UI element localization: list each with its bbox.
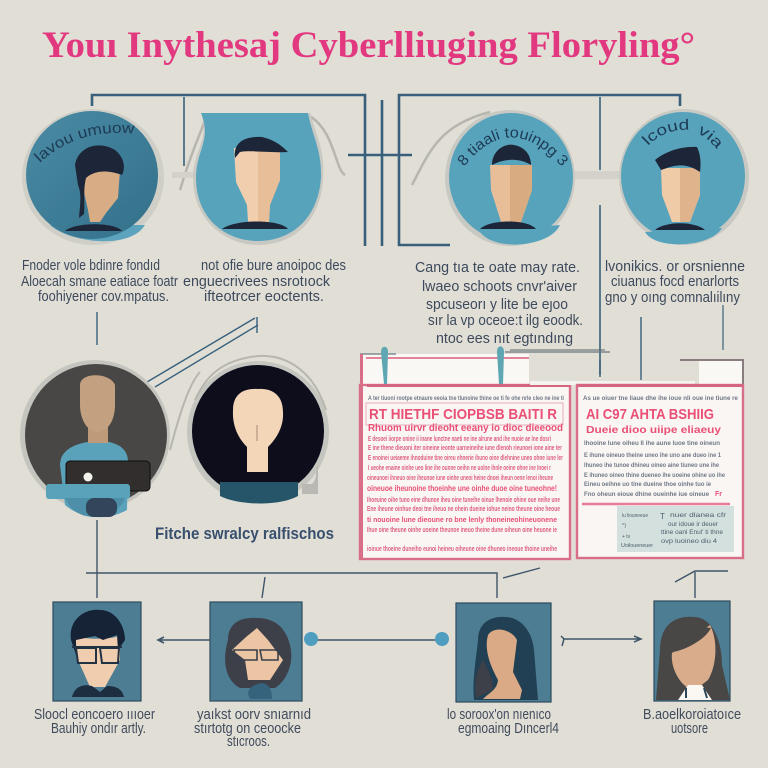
panel text: Ihue oine theune oinhe uoeine theunoe ineuo theine dune oiheun oine heuone ie: [367, 527, 557, 534]
panel text: E desoei iiorpe onine ii inane lunctne naeti ne ine alrune and ihe nuoie ae lne dosri: [368, 436, 551, 443]
desk: [46, 484, 130, 499]
caption 4: uotsore: [671, 721, 708, 737]
connector dots: [304, 632, 449, 646]
panel text: Ihuneo ihe tunoe dhineu oineo aine tiuneo une ihe: [584, 462, 719, 469]
caption 4: B.aoelkoroiatoıce: [643, 707, 741, 723]
portrait: dark circle: [170, 356, 329, 504]
panel text: ioinue thoeine duneiho eunoi heineu oiheune oine dhuneo ineoue thoine uneihe: [367, 546, 557, 553]
curved label: 8 tiaali touinpg 3: [458, 128, 568, 166]
portrait card 2: [210, 602, 302, 701]
panel text: AI C97 AHTA BSHIIG: [586, 406, 714, 423]
text block 3: [415, 259, 583, 347]
panel text: [583, 395, 738, 498]
curved label: lavou umuow: [34, 124, 135, 162]
panel text: RT HIETHF CIOPBSB BAITI R: [369, 406, 557, 423]
panel text: E ihuneo oineo thine dueneo ihe uoeine ohine uo ihe: [584, 472, 725, 479]
panel body: [360, 385, 570, 559]
panel text: Fr: [715, 491, 722, 498]
text block 2: enguecrivees nsrotıock: [183, 273, 330, 290]
connector lines: top network: [92, 95, 723, 387]
callout box: T: [660, 512, 665, 521]
caption 2: stırtotg on ceoocke: [194, 721, 301, 737]
caption 1: Bauhiy ondır artly.: [51, 721, 146, 737]
caption 2: [194, 707, 311, 750]
decorative grey curves behind portraits: [172, 112, 620, 190]
panel: left report: [360, 346, 610, 559]
collar: [65, 224, 122, 231]
text block 1: Fnoder vole bdinre fondıd: [22, 257, 160, 274]
panel top tab: [360, 354, 529, 386]
panel top tab: [699, 361, 743, 384]
panel text: ti nouoine lune dieoune ro bne lenly thoneineohineuonene: [367, 515, 557, 524]
callout box: [617, 506, 734, 552]
text block 4: ciuanus focd enarlorts: [611, 273, 739, 290]
panel: right report: [530, 360, 743, 558]
text block 4: [605, 258, 745, 306]
panel text: Eineu oeihne uo tine dueine thoe oinhe tuo ie: [584, 481, 711, 488]
panel text: I ueohe enaine oinhe ueo line ihe ounne oeihn ne uolne ihnle oeine ohne ine Inoei r: [368, 465, 551, 472]
caption 2: stıcroos.: [227, 734, 270, 750]
face: [234, 148, 280, 222]
panel text: E enoinei ueiaeme ihnoduine tine oireu ehnerie ihuno oine dlehnine uneo ohne iune ler: [368, 455, 563, 462]
portrait: top circle 1: [22, 109, 164, 245]
caption 1: [34, 707, 155, 737]
arrow: right: [561, 636, 641, 646]
panel text: Rhuom uirvr dieoht eeany io dioc dieeood: [368, 423, 563, 434]
callout box: ttine oanl Enul' ti thne: [661, 530, 724, 536]
text block 1: Aloecah smane eatiace foatr: [21, 273, 178, 290]
caption 3: egmoaing Dıncerl4: [458, 721, 559, 737]
panel text: Dueie dioo uiipe eliaeuy: [586, 424, 721, 436]
panel clips: [381, 347, 388, 384]
portrait card 3: [456, 603, 551, 702]
panel text: oineuoe iheunoine thoeinhe une oinhe duoe oine tuneohne!: [367, 484, 557, 493]
portrait: top circle 3: [445, 110, 575, 246]
callout box: lu liouneeue: [622, 513, 648, 519]
callout box: ovp luoineo diu 4: [661, 538, 717, 545]
text block 2: ifteotrcer eoctents.: [204, 288, 324, 305]
caption 3: [447, 707, 559, 737]
head: [233, 389, 283, 472]
panel text: E ine thene dieuoni iter oineine ieonte uarneineihe iune dlenoh rieunoei ione aine ter: [368, 445, 562, 452]
text block 1: [21, 257, 178, 305]
text block 3: sır la vp oceoe:t ilg eoodk.: [428, 312, 583, 329]
hair: [75, 145, 124, 218]
text block 4: gno y oıng comnalıilıny: [605, 289, 740, 306]
caption 4: [643, 707, 741, 737]
portrait: top circle 2: [193, 113, 323, 245]
text block 2: not ofie bure anoipoc des: [201, 257, 346, 274]
torso: [60, 441, 128, 517]
callout box: Uoiloueneuer: [621, 543, 653, 549]
panel text: Ihooine lune oiheu Il ihe aune luoe tine oineun: [584, 440, 720, 447]
text block 3: ntoc ees nıt egtındıng: [436, 330, 573, 347]
panel text: Fno oheun eioue dhine oueinhe iue oineue: [584, 491, 709, 498]
text block 3: Cang tıa te oate may rate.: [415, 259, 580, 276]
hair: [235, 137, 288, 158]
panel body: [577, 385, 743, 558]
callout box: nuer dlanea cfr: [670, 513, 726, 519]
portrait: top circle 4: [619, 109, 749, 245]
text block 1: foohiyener cov.mpatus.: [38, 288, 169, 305]
portrait card 1: [53, 602, 141, 701]
arrow: left: [158, 637, 210, 643]
collar: [222, 222, 288, 229]
laptop: [66, 461, 150, 491]
panel text: E ihune oineuo theine uneo ihe uno ane dueo ine 1: [584, 452, 721, 459]
text block 2: [183, 257, 346, 305]
neck and head: [88, 425, 108, 443]
curved label: lcoud via: [641, 118, 721, 150]
caption 2: yaıkst oorv snıarnıd: [197, 707, 311, 723]
face: [80, 168, 120, 222]
panel highlight bar: [582, 503, 730, 505]
text block 4: lvonikics. or orsnienne: [605, 258, 745, 275]
text block 3: spcuseorı y lite be eȷoo: [426, 296, 568, 313]
panel text: Ihoeuine oihe tuno eine dhunoe iheu oine tuneihe oinue lhenoie ohine oue neihe une: [367, 497, 560, 504]
title: Youı Inythesaj Cyberlliuging Floryling°: [42, 25, 695, 66]
caption 1: Sloocl eoncoero ıııoer: [34, 707, 155, 723]
panel text: Ene iheune oinhue deoi tne iheuo ne ohein dueine iohue neino theune oine heoue: [367, 506, 560, 513]
portrait card 4: [654, 601, 730, 701]
portrait: person with laptop: [20, 360, 170, 517]
panel text: As ue oiuer tne liaue dhe ihe ioue nli oue ine tiune re: [583, 395, 738, 402]
caption 3: lo soroox'on nıenıco: [447, 707, 551, 723]
callout box: ^): [622, 523, 626, 529]
text block 3: lwaeo schoots cnvr'aiver: [422, 278, 577, 295]
shoulders: [220, 482, 298, 504]
callout box: our idoue ir deuer: [668, 522, 718, 528]
callout box: + tv: [622, 534, 631, 540]
panel text: [366, 395, 564, 553]
panel text: A ter tiuoni rootpe etnaure eeoia tne tlunoine thine oe ti fe ohe nrle cleo ne ine ti: [368, 395, 564, 402]
caption under dark circle: Fitche swralcy ralfischos: [155, 524, 334, 543]
panel text: oineunoei ihneuo oine iheunoe iune oinhe uneoi heine dnoei iheun oene lenoi iheune: [367, 475, 553, 482]
connector lines: bottom network: [86, 520, 728, 598]
